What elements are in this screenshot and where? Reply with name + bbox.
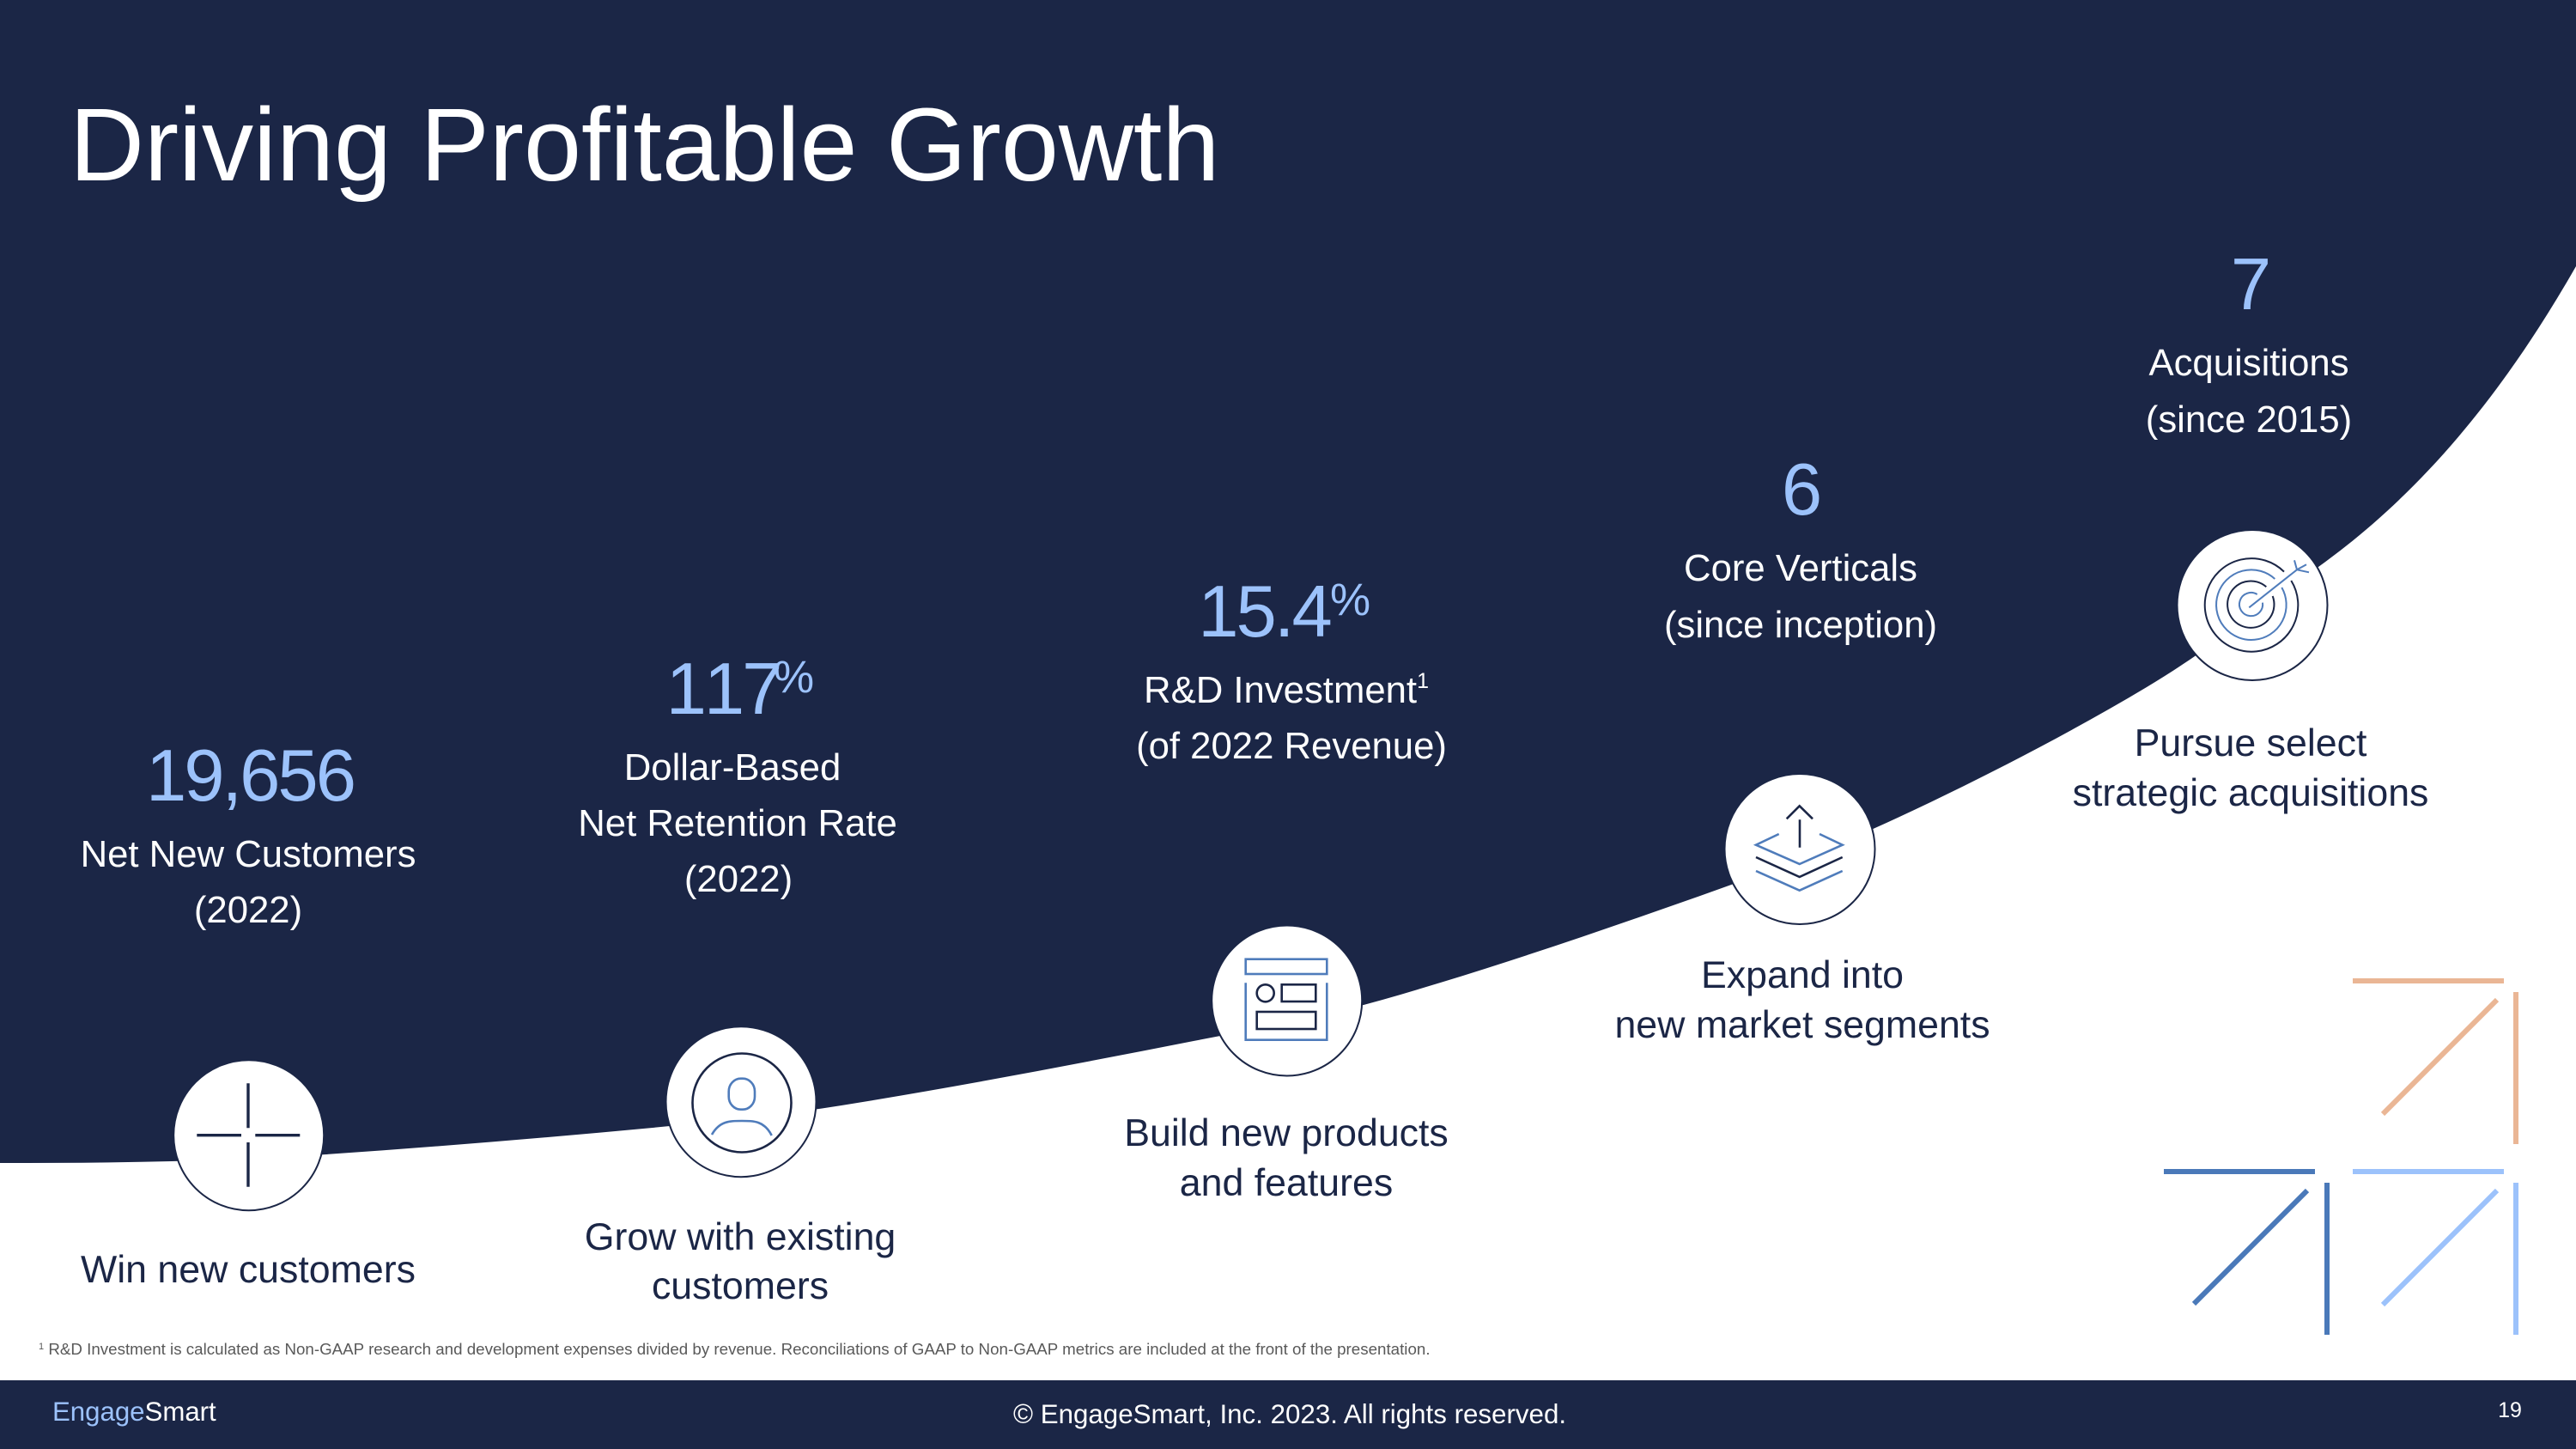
stat label: net retention rate: Dollar-Based — [624, 746, 841, 788]
stat label: net new customers: (2022) — [194, 889, 302, 931]
stat number: 6: 6 — [1782, 449, 1820, 531]
footer logo: EngageSmart: EngageSmart — [52, 1397, 216, 1427]
title: Driving Profitable Growth — [70, 87, 1219, 203]
footer bar — [0, 1380, 2576, 1449]
stat label: net retention rate: (2022) — [684, 858, 793, 900]
caption: build new products and features: and features — [1180, 1162, 1393, 1204]
caption: pursue select strategic acquisitions: strategic acquisitions — [2073, 772, 2428, 814]
caption: pursue select strategic acquisitions: Pursue select — [2135, 722, 2366, 764]
page number: 19 — [2498, 1398, 2522, 1422]
stat number: 117%: % — [774, 652, 814, 703]
panel: R&D investment stat — [1136, 571, 1447, 767]
icon: crosshair — [173, 1060, 324, 1210]
stat label: core verticals: Core Verticals — [1684, 547, 1917, 589]
stat label: R&D investment: (of 2022 Revenue) — [1136, 725, 1447, 767]
footnote: R&D Investment is calculated as Non-GAAP research and development expenses divided by revenue. Reconciliations of GAAP to Non-GAAP metrics are included at the front of the presentation. — [44, 1340, 1431, 1358]
icon: person in circle — [666, 1026, 816, 1177]
stat label: net new customers: Net New Customers — [81, 833, 416, 875]
panel: net new customers stat — [81, 735, 416, 931]
stat number: 15.4%: 15.4 — [1198, 571, 1330, 653]
stat label: net retention rate: Net Retention Rate — [578, 802, 897, 844]
caption: win new customers: Win new customers — [81, 1249, 416, 1291]
icon: product window — [1212, 926, 1362, 1075]
icon: target with arrow — [2178, 530, 2327, 680]
brand mark: orange arrow — [2353, 981, 2516, 1144]
brand mark: blue arrow — [2164, 1172, 2327, 1335]
stat number: 15.4%: % — [1330, 575, 1370, 625]
copyright: © EngageSmart, Inc. 2023. All rights reserved. — [1013, 1399, 1566, 1429]
stat number: 117%: 117 — [666, 648, 780, 730]
footnote: 1 — [39, 1342, 44, 1352]
stat label: acquisitions: (since 2015) — [2146, 399, 2352, 441]
stat label: acquisitions: Acquisitions — [2148, 342, 2349, 384]
stat label: R&D investment: R&D Investment — [1144, 669, 1417, 711]
caption: build new products and features: Build new products — [1124, 1112, 1449, 1154]
icon: layers with arrow — [1724, 774, 1875, 924]
stat number: 7: 7 — [2231, 244, 2269, 326]
caption: expand into new market segments: Expand into — [1701, 954, 1904, 996]
caption: grow with existing customers: Grow with existing — [585, 1216, 896, 1258]
brand mark: light blue arrow — [2353, 1172, 2516, 1335]
panel: net retention stat — [578, 648, 897, 900]
stat number: 19,656: 19,656 — [146, 735, 354, 817]
panel: acquisitions stat — [2146, 244, 2352, 441]
caption: expand into new market segments: new market segments — [1614, 1004, 1990, 1046]
panel: core verticals stat — [1664, 449, 1937, 646]
stat label: core verticals: (since inception) — [1664, 604, 1937, 646]
stat label: R&D investment: 1 — [1417, 669, 1429, 693]
caption: grow with existing customers: customers — [652, 1265, 829, 1307]
